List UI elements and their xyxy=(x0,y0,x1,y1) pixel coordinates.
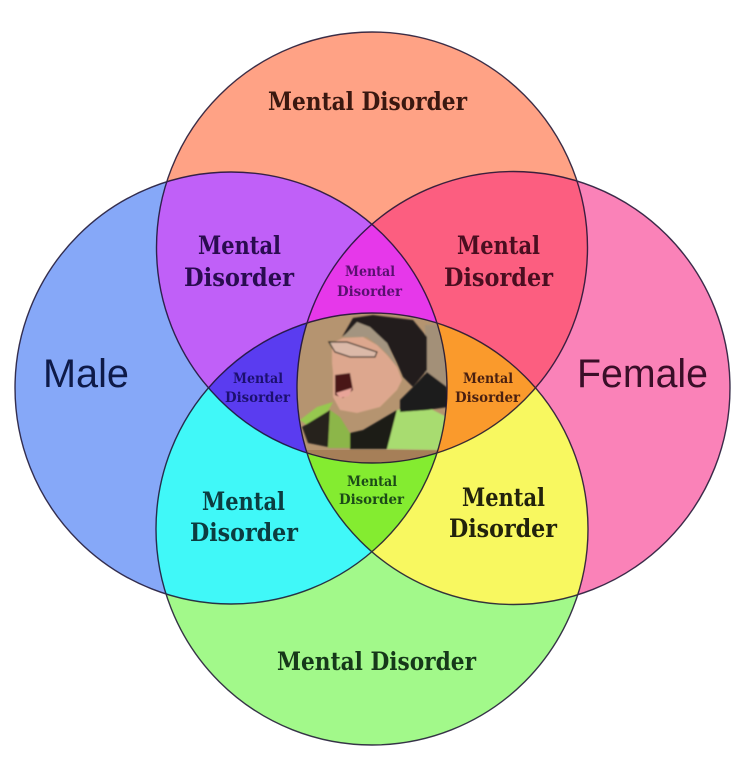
label: top center: Disorder xyxy=(337,284,403,300)
tongue xyxy=(336,388,352,398)
label: right center: Disorder xyxy=(455,390,521,406)
glasses xyxy=(329,342,377,357)
label: top center xyxy=(337,264,403,300)
wall detail xyxy=(425,325,450,390)
label: top left: Disorder xyxy=(184,263,295,292)
label: left center: Disorder xyxy=(225,390,291,406)
label: bottom right: Mental xyxy=(462,483,545,512)
scarf xyxy=(326,410,352,450)
dark coat left xyxy=(302,410,330,447)
label: bottom left: Mental xyxy=(202,487,285,516)
label: bottom right xyxy=(449,483,558,543)
label: top: Mental Disorder xyxy=(268,87,468,116)
jacket shoulder left xyxy=(300,402,333,425)
label: right center: Mental xyxy=(463,371,513,387)
label: bottom center: Disorder xyxy=(339,492,405,508)
person figure xyxy=(300,315,450,450)
region: right triple orange xyxy=(438,324,535,452)
ground strip xyxy=(307,450,437,462)
label: left center xyxy=(225,371,291,406)
label: top center: Mental xyxy=(345,264,395,280)
photo: screaming person xyxy=(297,313,447,463)
face xyxy=(332,337,402,413)
circle: bottom only xyxy=(156,313,588,745)
label: right center xyxy=(455,371,521,406)
label: left center: Mental xyxy=(233,371,283,387)
label: bottom center xyxy=(339,474,405,508)
label: bottom left: Disorder xyxy=(190,518,299,547)
label: top right: Disorder xyxy=(444,263,554,292)
label: bottom left xyxy=(190,487,299,547)
photo background xyxy=(297,313,446,450)
circle: female xyxy=(297,172,730,604)
label: male: Male xyxy=(43,352,129,396)
mouth xyxy=(335,373,353,398)
region: left triple blue xyxy=(208,323,307,453)
label: bottom center: Mental xyxy=(347,474,397,490)
hat xyxy=(342,315,427,387)
label: top right: Mental xyxy=(457,231,540,260)
region: top and male xyxy=(156,172,372,388)
black chest xyxy=(350,410,397,449)
hood xyxy=(400,372,448,412)
region: top and female xyxy=(372,172,588,387)
hair xyxy=(343,322,397,367)
label: female: Female xyxy=(577,352,708,396)
region: bottom triple green xyxy=(307,453,437,552)
label: bottom right: Disorder xyxy=(449,514,558,543)
label: top left: Mental xyxy=(198,231,281,260)
label: top left xyxy=(184,231,295,292)
region: bottom and male xyxy=(156,325,372,604)
circle: male xyxy=(15,172,447,604)
region: bottom and female xyxy=(372,325,588,604)
region: top triple magenta xyxy=(308,224,436,322)
label: top right xyxy=(444,231,554,292)
label: bottom: Mental Disorder xyxy=(277,647,477,676)
jacket right xyxy=(387,407,447,450)
circle: top only xyxy=(156,32,588,463)
